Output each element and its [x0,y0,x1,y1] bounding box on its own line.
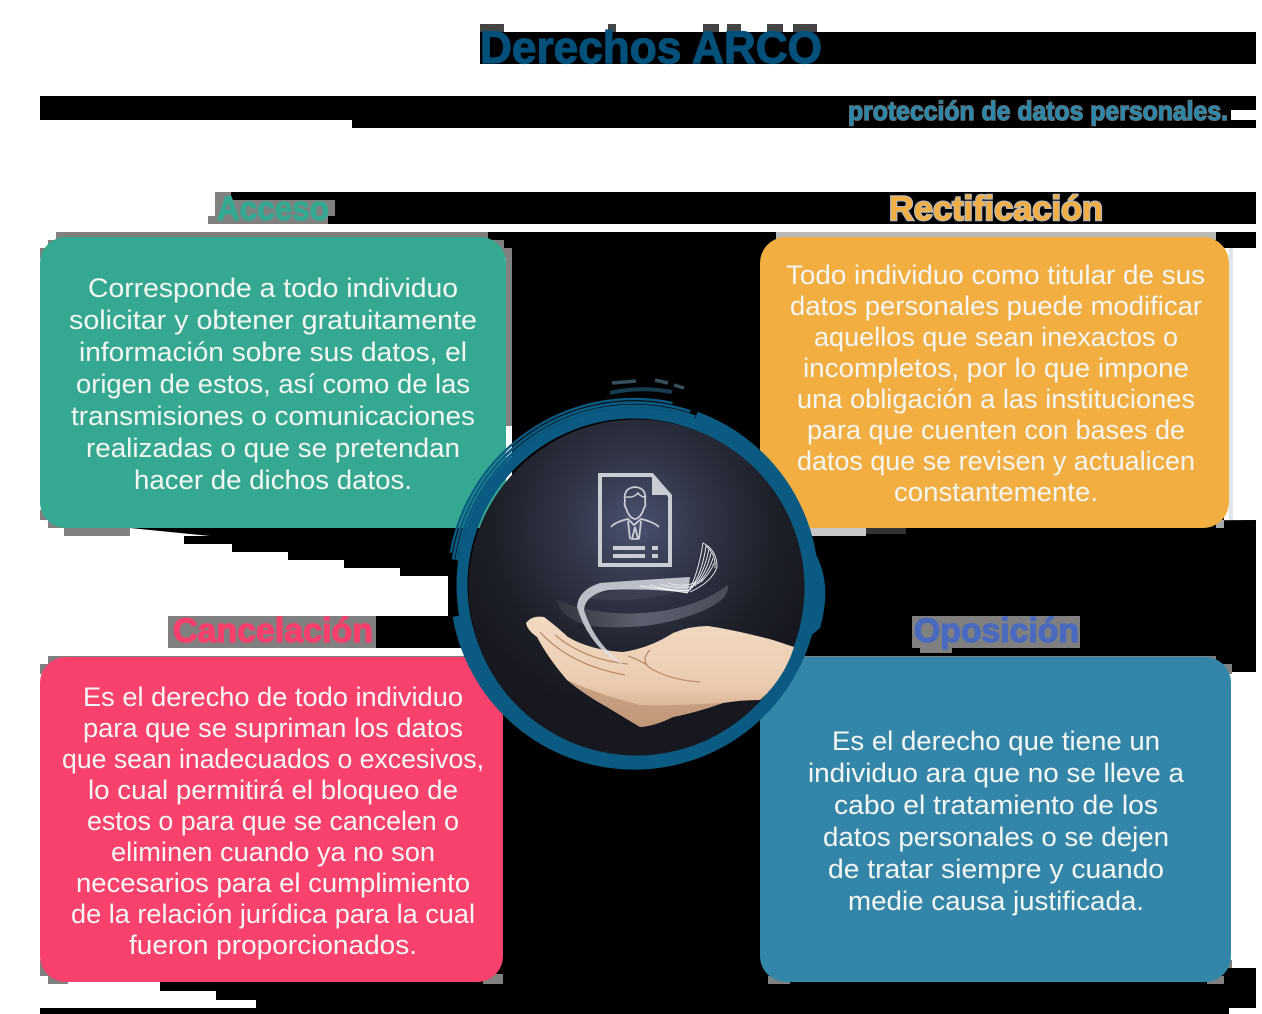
text: oposición: Es el derecho que tiene un [832,726,1160,756]
text: cancelación [62,682,484,960]
central illustration [419,370,849,800]
subtitle: protección de datos personales. [848,96,1228,126]
card: acceso [40,237,506,528]
floating plate [557,583,728,627]
text: cancelación: Es el derecho de todo individuo [83,682,463,712]
text: cancelación: fueron proporcionados. [129,930,417,960]
heading: oposición: Oposición [914,612,1079,650]
heading: acceso: Acceso [217,190,329,228]
heading: cancelación: Cancelación [173,612,373,650]
card: rectificación [760,237,1229,528]
text: acceso: origen de estos, así como de las [76,369,470,399]
text: oposición [808,726,1185,916]
heading: rectificación: Rectificación [889,190,1103,228]
text: acceso: solicitar y obtener gratuitamente [69,305,477,335]
panel: oposición [760,612,1231,982]
text: cancelación: eliminen cuando ya no son [111,837,435,867]
title: Derechos ARCO [480,22,822,73]
text: rectificación: incompletos, por lo que impone [803,353,1189,383]
text: cancelación: que sean inadecuados o excesivos, [62,744,484,774]
text: oposición: individuo ara que no se lleve a [808,758,1185,788]
text: cancelación: para que se supriman los datos [83,713,463,743]
card: cancelación [40,657,503,982]
text: rectificación [786,260,1205,507]
text: rectificación: constantemente. [894,477,1098,507]
text: acceso: información sobre sus datos, el [79,337,467,367]
text: acceso [69,273,477,495]
text: cancelación: estos o para que se cancelen o [87,806,459,836]
text: cancelación: de la relación jurídica para la cual [71,899,475,929]
text: oposición: medie causa justificada. [848,886,1144,916]
text: acceso: Corresponde a todo individuo [88,273,458,303]
brush ring [419,370,849,800]
panel: rectificación [760,190,1229,528]
text: rectificación: datos personales puede modificar [790,291,1202,321]
text: rectificación: Todo individuo como titular de sus [786,260,1205,290]
text: rectificación: datos que se revisen y actualicen [797,446,1195,476]
icon: document with person [600,473,672,565]
text: oposición: de tratar siempre y cuando [828,854,1164,884]
text: oposición: datos personales o se dejen [823,822,1169,852]
text: acceso: realizadas o que se pretendan [86,433,460,463]
dark disc [468,420,804,756]
card: oposición [760,657,1231,982]
text: rectificación: aquellos que sean inexactos o [814,322,1178,352]
text: rectificación: para que cuenten con bases de [807,415,1185,445]
ribbon [577,543,717,667]
text: cancelación: necesarios para el cumplimiento [76,868,470,898]
hand [526,617,794,727]
text: acceso: hacer de dichos datos. [134,465,412,495]
text: acceso: transmisiones o comunicaciones [71,401,475,431]
text: cancelación: lo cual permitirá el bloqueo de [88,775,458,805]
panel: acceso [40,190,506,528]
text: oposición: cabo el tratamiento de los [834,790,1158,820]
text: rectificación: una obligación a las instituciones [797,384,1195,414]
panel: cancelación [40,612,503,982]
